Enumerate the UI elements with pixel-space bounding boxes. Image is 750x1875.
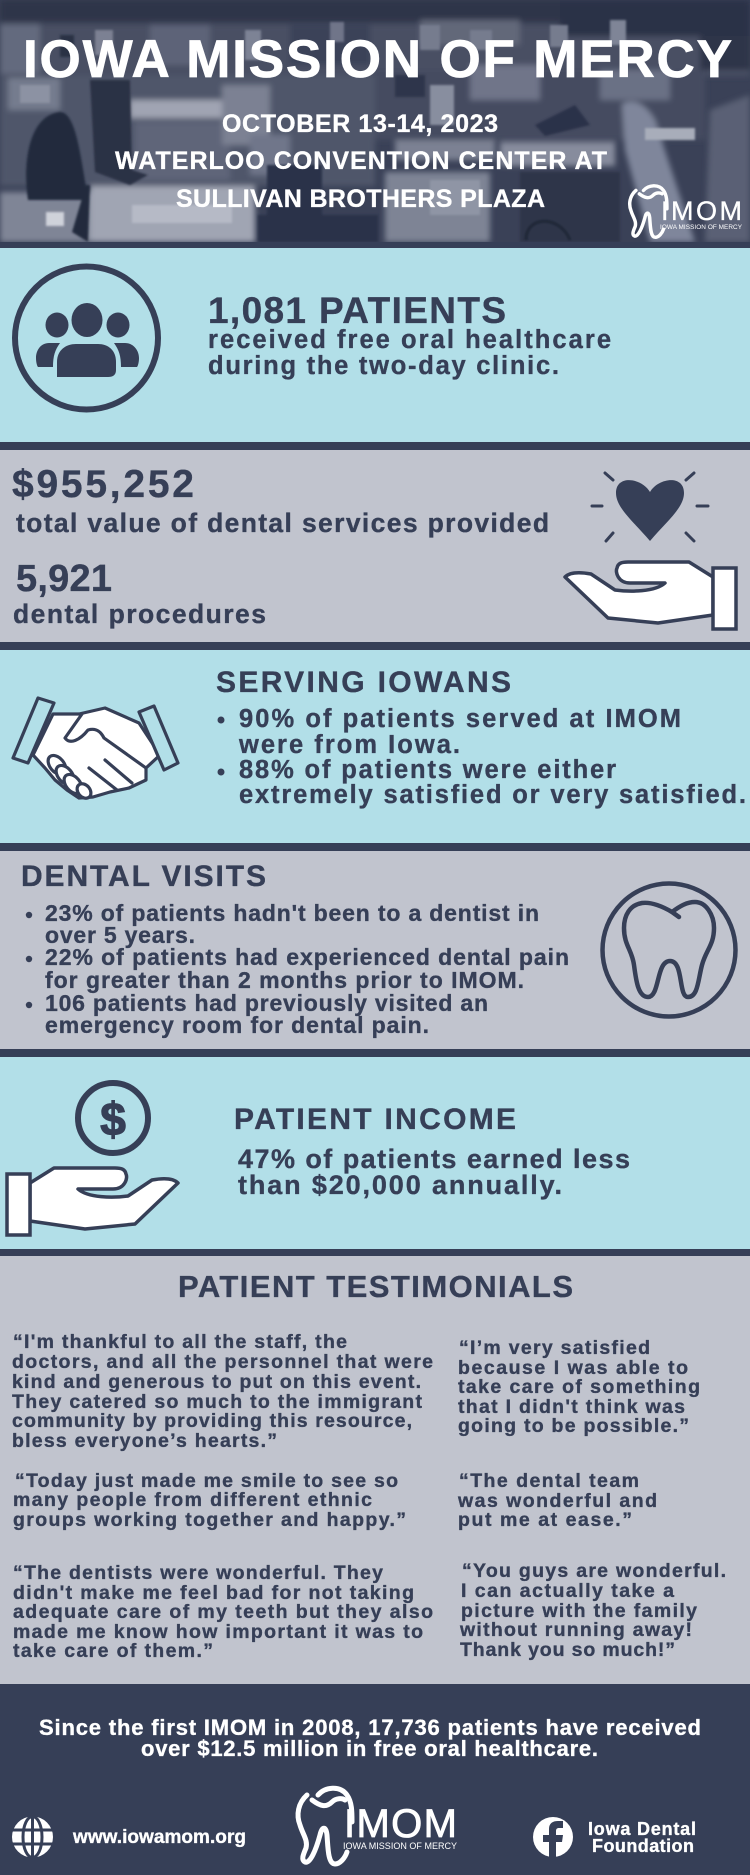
panel: footer bbox=[0, 1684, 750, 1875]
panel: patient testimonials bbox=[0, 1256, 750, 1684]
event date and venue bbox=[115, 110, 607, 213]
panel: patients bbox=[0, 248, 750, 450]
panel: value and procedures bbox=[0, 450, 750, 650]
bullet list: Iowans: extremely satisfied or very satisfied. bbox=[239, 781, 746, 809]
event date and venue: WATERLOO CONVENTION CENTER AT bbox=[115, 147, 607, 175]
text: income statistic: than $20,000 annually. bbox=[238, 1170, 562, 1200]
panel: serving Iowans bbox=[0, 650, 750, 851]
bullet list: dental visits: over 5 years. bbox=[45, 922, 195, 948]
quote: very satisfied: that I didn't think was bbox=[458, 1396, 685, 1418]
quote: very satisfied bbox=[458, 1337, 700, 1437]
bullet list: dental visits bbox=[26, 900, 569, 1038]
text: patients description bbox=[208, 326, 611, 380]
stat: procedures: 5,921 bbox=[16, 558, 112, 600]
text: Iowa Dental Foundation bbox=[588, 1819, 696, 1856]
bullet list: Iowans: 88% of patients were either bbox=[239, 756, 616, 784]
text: income statistic bbox=[238, 1144, 630, 1200]
quote: thankful to staff: “I'm thankful to all the staff, the bbox=[13, 1331, 347, 1353]
quote: thankful to staff: bless everyone’s hearts.” bbox=[12, 1430, 277, 1452]
icon: coin above open hand: $ bbox=[100, 1093, 126, 1145]
header background photo (stylised) bbox=[0, 0, 750, 242]
quote: made me smile bbox=[13, 1470, 406, 1531]
event date and venue: OCTOBER 13-14, 2023 bbox=[222, 110, 498, 138]
icon: globe bbox=[12, 1816, 53, 1858]
quote: dental team: “The dental team bbox=[459, 1470, 639, 1492]
quote: dental team bbox=[457, 1470, 657, 1531]
quote: dentists were wonderful: made me know how important it was to bbox=[13, 1621, 423, 1643]
logo: IMOM header: IOWA MISSION OF MERCY bbox=[660, 224, 743, 231]
logo: IMOM header: IMOM bbox=[661, 196, 742, 226]
quote: very satisfied: “I’m very satisfied bbox=[459, 1337, 650, 1359]
bullet list: Iowans: were from Iowa. bbox=[238, 731, 460, 759]
quote: dentists were wonderful bbox=[13, 1562, 433, 1662]
text: Iowa Dental Foundation: Foundation bbox=[592, 1836, 694, 1856]
quote: thankful to staff: community by providing this resource, bbox=[12, 1410, 412, 1432]
text: patients description: received free oral healthcare bbox=[208, 326, 611, 354]
quote: thankful to staff bbox=[12, 1331, 433, 1452]
quote: you guys are wonderful: I can actually take a bbox=[461, 1580, 674, 1602]
quote: thankful to staff: kind and generous to put on this event. bbox=[12, 1371, 421, 1393]
heading: patient testimonials: PATIENT TESTIMONIALS bbox=[178, 1269, 573, 1304]
text: patients description: during the two-day clinic. bbox=[208, 352, 559, 380]
quote: dentists were wonderful: “The dentists were wonderful. They bbox=[13, 1562, 383, 1584]
logo: IMOM footer bbox=[298, 1788, 457, 1864]
bullet list: dental visits: for greater than 2 months prior to IMOM. bbox=[45, 967, 524, 993]
quote: you guys are wonderful bbox=[459, 1560, 726, 1661]
quote: dental team: was wonderful and bbox=[457, 1490, 657, 1512]
panel: dental visits bbox=[0, 851, 750, 1057]
icon: heart above open hand bbox=[565, 473, 736, 629]
quote: dental team: put me at ease.” bbox=[458, 1509, 632, 1531]
stat: 1,081 patients: 1,081 PATIENTS bbox=[208, 290, 506, 331]
website: www.iowamom.org bbox=[72, 1827, 246, 1848]
quote: made me smile: many people from different ethnic bbox=[13, 1489, 372, 1511]
heading: dental visits: DENTAL VISITS bbox=[21, 860, 266, 893]
text: income statistic: 47% of patients earned less bbox=[238, 1144, 630, 1174]
heading: serving Iowans: SERVING IOWANS bbox=[216, 666, 511, 699]
title: IOWA MISSION OF MERCY bbox=[23, 30, 732, 89]
panel: header with title over photo bbox=[0, 0, 750, 248]
stat: total value bbox=[12, 463, 549, 538]
logo: IMOM footer: IOWA MISSION OF MERCY bbox=[343, 1841, 457, 1851]
quote: thankful to staff: doctors, and all the personnel that were bbox=[12, 1351, 433, 1373]
quote: you guys are wonderful: without running away! bbox=[459, 1619, 692, 1641]
icon: group of people in circle bbox=[15, 266, 158, 410]
text: cumulative impact bbox=[39, 1715, 701, 1761]
quote: made me smile: “Today just made me smile to see so bbox=[15, 1470, 398, 1492]
quote: very satisfied: going to be possible.” bbox=[458, 1415, 689, 1437]
logo: IMOM header bbox=[630, 186, 743, 237]
quote: very satisfied: take care of something bbox=[458, 1376, 700, 1398]
quote: thankful to staff: They catered so much to the immigrant bbox=[12, 1391, 422, 1413]
bullet list: dental visits: 106 patients had previously visited an bbox=[45, 990, 488, 1016]
quote: dentists were wonderful: take care of them.” bbox=[13, 1640, 213, 1662]
quote: you guys are wonderful: “You guys are wonderful. bbox=[462, 1560, 726, 1582]
text: cumulative impact: Since the first IMOM in 2008, 17,736 patients have received bbox=[39, 1715, 701, 1740]
panel: patient income bbox=[0, 1057, 750, 1256]
text: Iowa Dental Foundation: Iowa Dental bbox=[588, 1819, 696, 1839]
bullet list: Iowans bbox=[218, 705, 746, 809]
bullet list: dental visits: emergency room for dental pain. bbox=[45, 1012, 429, 1038]
stat: procedures bbox=[13, 558, 266, 629]
quote: dentists were wonderful: adequate care of my teeth but they also bbox=[13, 1601, 433, 1623]
icon: tooth in circle bbox=[602, 884, 736, 1016]
icon: handshake bbox=[13, 698, 178, 801]
quote: made me smile: groups working together and happy.” bbox=[13, 1509, 406, 1531]
quote: you guys are wonderful: picture with the family bbox=[461, 1600, 697, 1622]
stat: total value: $955,252 bbox=[12, 463, 194, 506]
stat: total value: total value of dental services provided bbox=[16, 508, 549, 538]
bullet list: Iowans: 90% of patients served at IMOM bbox=[239, 705, 681, 733]
icon: coin above open hand bbox=[7, 1083, 178, 1235]
text: cumulative impact: over $12.5 million in free oral healthcare. bbox=[141, 1736, 598, 1761]
bullet list: dental visits: 22% of patients had experienced dental pain bbox=[45, 944, 569, 970]
quote: you guys are wonderful: Thank you so much!” bbox=[460, 1639, 675, 1661]
quote: dentists were wonderful: didn't make me feel bad for not taking bbox=[13, 1582, 414, 1604]
heading: patient income: PATIENT INCOME bbox=[234, 1103, 516, 1136]
bullet list: dental visits: 23% of patients hadn't been to a dentist in bbox=[45, 900, 539, 926]
logo: IMOM footer: IMOM bbox=[344, 1802, 457, 1846]
event date and venue: SULLIVAN BROTHERS PLAZA bbox=[176, 185, 545, 213]
quote: very satisfied: because I was able to bbox=[458, 1357, 688, 1379]
stat: procedures: dental procedures bbox=[13, 599, 266, 629]
icon: Facebook bbox=[533, 1817, 573, 1858]
